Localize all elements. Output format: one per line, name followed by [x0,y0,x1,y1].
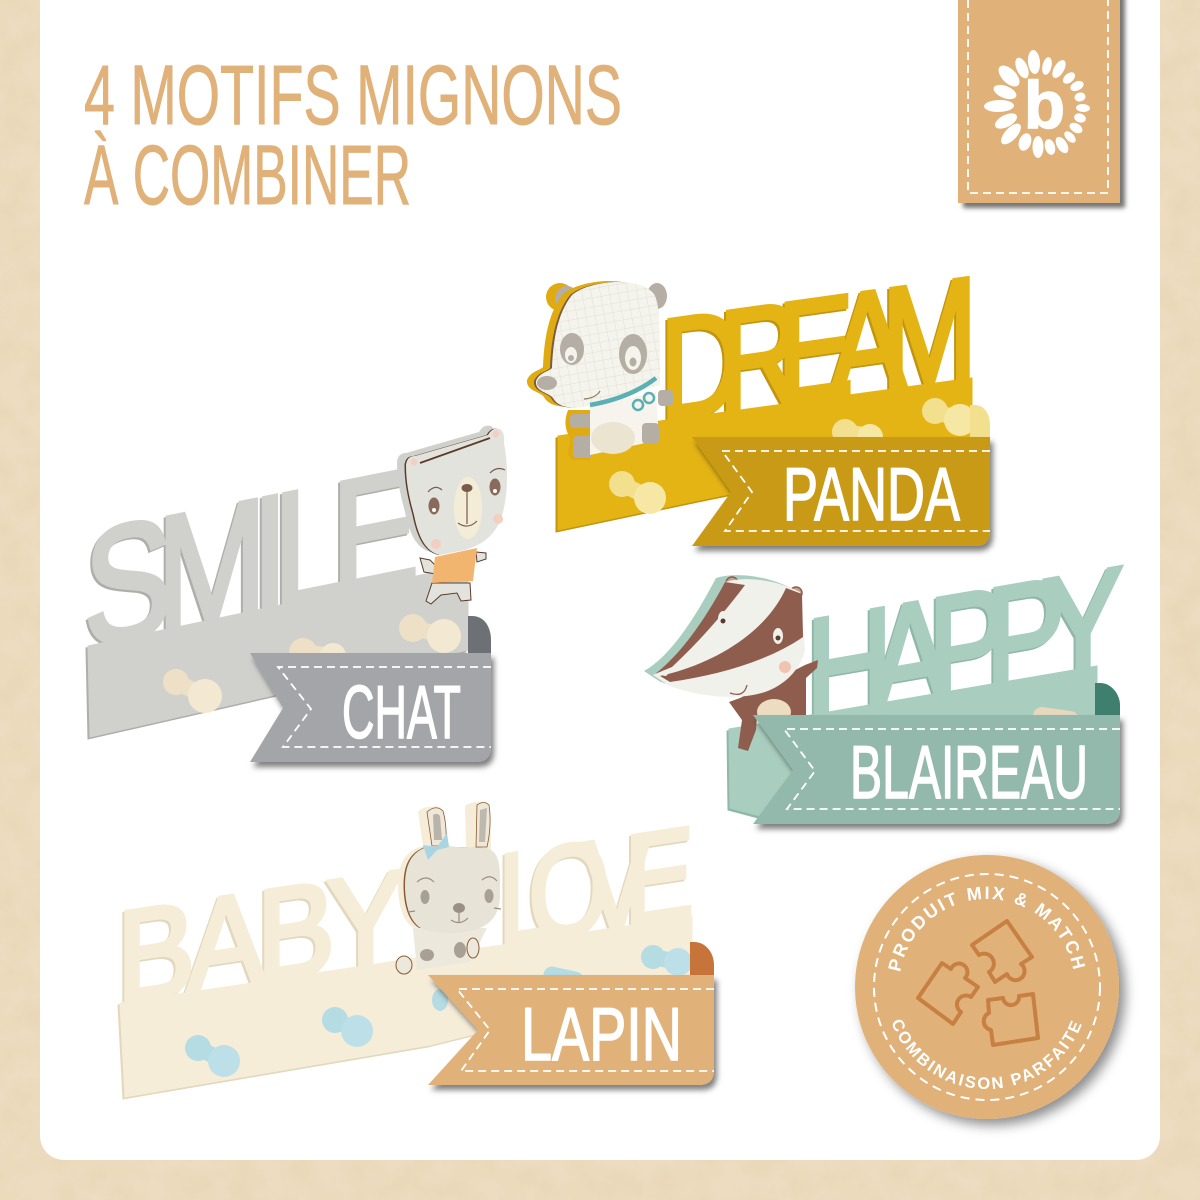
title [84,48,622,222]
ribbon: LAPIN [428,975,714,1085]
ribbon: CHAT: CHAT [342,670,461,754]
board: BABY LOVE: BABY [117,843,403,1031]
ribbon fold [690,942,714,975]
icon: badger character [644,575,818,751]
badge text [888,886,1086,1089]
panel: badger coat rack [644,534,1121,824]
brand tag with logo [958,0,1120,203]
board: BABY LOVE [117,801,692,1097]
ribbon fold [468,616,491,653]
board: SMILE: SMILE [84,433,414,683]
board: HAPPY [729,534,1121,816]
badge: mix and match [852,852,1134,1134]
pegs [609,398,976,514]
ribbon: CHAT [250,653,491,762]
pegs [163,614,461,713]
board: DREAM [558,247,972,530]
ribbon fold [970,405,990,437]
icon: sunflower logo: b [1024,68,1065,143]
board: HAPPY: HAPPY [806,534,1121,757]
ribbon: PANDA [692,437,990,546]
icon: puzzle pieces [918,921,1038,1045]
icon: panda character [527,281,673,460]
icon: sunflower logo [984,49,1090,158]
ribbon: PANDA: PANDA [783,452,960,536]
pegs [1042,716,1070,720]
title: À COMBINER [84,128,411,222]
ribbon fold [1095,683,1120,715]
board: BABY LOVE: LOVE [498,801,690,975]
ribbon: BLAIREAU [753,715,1120,824]
pegs [185,945,692,1077]
panel: rabbit coat rack [117,801,714,1097]
board: DREAM: DREAM [660,247,968,451]
icon: bear character [397,426,507,604]
icon: rabbit character [396,802,501,974]
board: SMILE [84,433,468,737]
badge text: PRODUIT MIX & MATCH [888,886,1086,972]
panel: panda coat rack [527,247,990,546]
badge text: COMBINAISON PARFAITE [892,1020,1082,1089]
title: 4 MOTIFS MIGNONS [84,48,622,142]
ribbon: LAPIN: LAPIN [521,992,682,1076]
panel: cat coat rack [84,426,507,762]
